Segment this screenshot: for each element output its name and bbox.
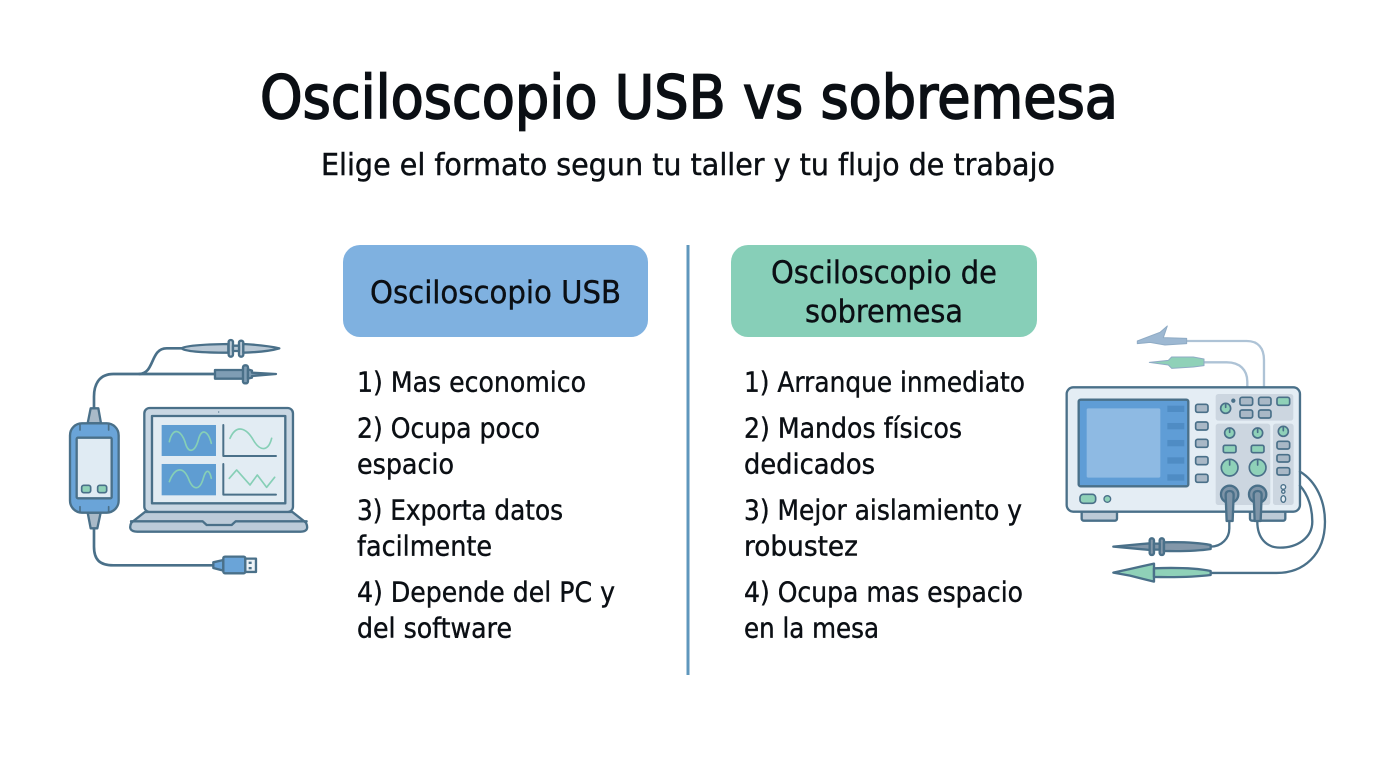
list: USB advantages: 1) Mas economico xyxy=(357,366,586,398)
center divider xyxy=(686,245,690,675)
list: benchtop advantages: 1) Arranque inmediato xyxy=(744,366,1025,398)
panel: USB header: Osciloscopio USB xyxy=(370,275,621,311)
icon: USB oscilloscope with laptop xyxy=(70,340,307,573)
list: benchtop advantages: 3) Mejor aislamiento y xyxy=(744,494,1022,526)
list: USB advantages: 2) Ocupa poco xyxy=(357,412,540,444)
list: benchtop advantages: robustez xyxy=(744,530,858,562)
right column buttons xyxy=(1277,441,1290,475)
list: USB advantages: facilmente xyxy=(357,530,492,562)
list: benchtop advantages: en la mesa xyxy=(744,612,879,644)
list: USB advantages: del software xyxy=(357,612,512,644)
green clip xyxy=(1149,357,1204,368)
chassis xyxy=(1067,387,1300,512)
probe two xyxy=(215,365,276,383)
icon: benchtop oscilloscope xyxy=(1067,326,1325,582)
list: USB advantages: 4) Depende del PC y xyxy=(357,576,615,608)
top controls xyxy=(1221,397,1290,418)
panel: benchtop header: Osciloscopio de xyxy=(771,255,997,291)
probe one xyxy=(182,340,279,357)
knobs xyxy=(1221,404,1288,476)
feet xyxy=(1082,508,1117,521)
power button xyxy=(1080,494,1096,503)
lower probe green xyxy=(1113,564,1211,582)
BNC connectors xyxy=(1221,486,1266,521)
USB device xyxy=(70,408,119,528)
list: benchtop advantages: 4) Ocupa mas espacio xyxy=(744,576,1023,608)
list: USB advantages: espacio xyxy=(357,448,454,480)
USB plug xyxy=(213,557,256,573)
panel: benchtop header: sobremesa xyxy=(805,294,963,330)
laptop xyxy=(130,408,307,532)
title: Osciloscopio USB vs sobremesa xyxy=(260,63,1118,133)
crocodile clip xyxy=(1137,326,1187,345)
output cables xyxy=(1211,472,1325,573)
list: benchtop advantages: dedicados xyxy=(744,448,875,480)
list: USB advantages: 3) Exporta datos xyxy=(357,494,563,526)
lower probe grey xyxy=(1113,538,1211,555)
light upper leads xyxy=(1187,341,1264,387)
subtitle: Elige el formato segun tu taller y tu flujo de trabajo xyxy=(321,148,1055,183)
control panels xyxy=(1216,394,1294,505)
list: benchtop advantages: 2) Mandos físicos xyxy=(744,412,962,444)
list: benchtop advantages xyxy=(744,366,1025,644)
panel: USB header xyxy=(343,245,648,337)
screen xyxy=(1079,400,1188,486)
cables xyxy=(94,348,215,565)
panel: benchtop header xyxy=(731,245,1037,337)
list: USB advantages xyxy=(357,366,615,644)
side buttons xyxy=(1196,404,1208,482)
